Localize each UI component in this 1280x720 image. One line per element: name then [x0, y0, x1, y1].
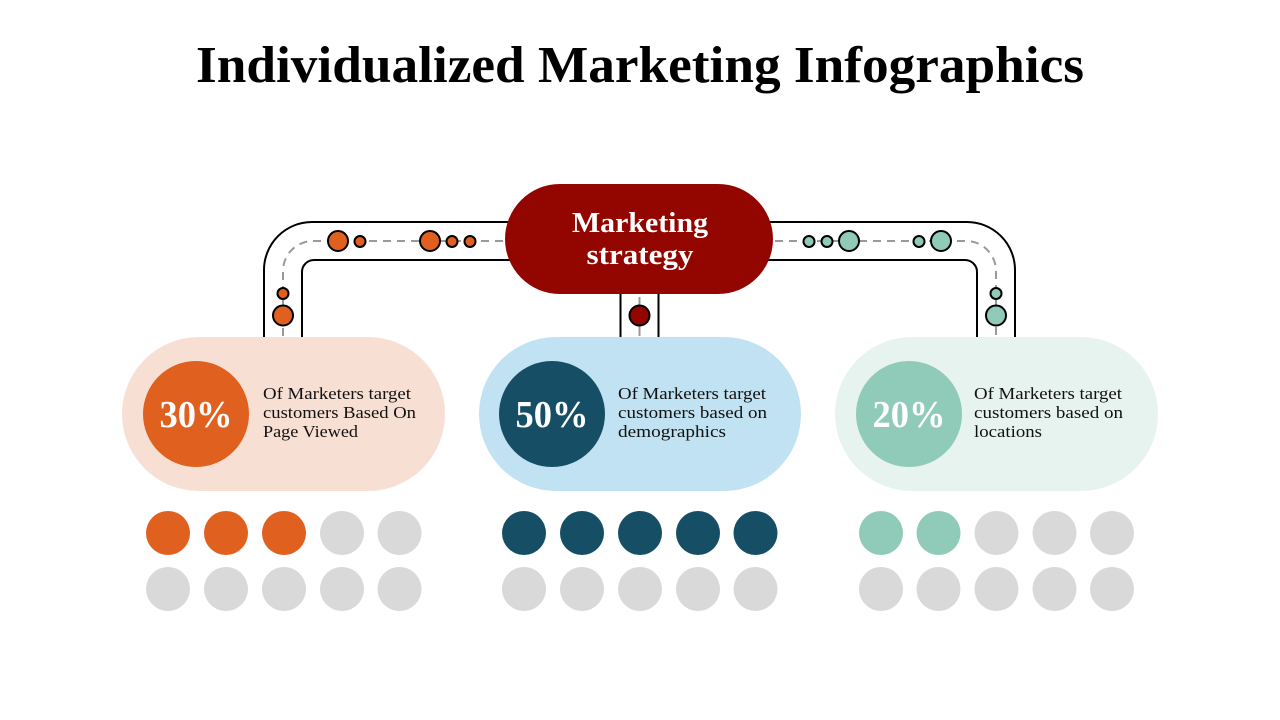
- panel: 30% page viewed: [122, 337, 445, 491]
- connector road: left and right arms: [264, 222, 1015, 340]
- panel: 50% demographics: 50%: [516, 394, 588, 436]
- connector road: centre stem: [620, 290, 658, 340]
- panel: 20% locations: Of Marketers target: [974, 384, 1122, 403]
- central node: marketing strategy: strategy: [586, 240, 694, 271]
- title: Individualized Marketing Infographics: [196, 37, 1084, 94]
- panel: 20% locations: locations: [974, 422, 1042, 441]
- orange route dots: [273, 231, 476, 326]
- green route dots: [804, 231, 1006, 326]
- panel: 20% locations: 20%: [872, 394, 946, 436]
- red route dot: [630, 306, 650, 326]
- dot gauge: 5 of 10: [502, 511, 778, 611]
- panel: 20% locations: [835, 337, 1158, 491]
- panel: 30% page viewed: Page Viewed: [263, 422, 359, 441]
- panel: 50% demographics: Of Marketers target: [618, 384, 766, 403]
- panel: 50% demographics: [479, 337, 801, 491]
- central node: marketing strategy: [505, 184, 773, 294]
- dot gauge: 2 of 10: [859, 511, 1134, 611]
- panel: 50% demographics: demographics: [618, 422, 726, 441]
- panel: 30% page viewed: customers Based On: [263, 403, 417, 422]
- central node: marketing strategy: Marketing: [572, 208, 708, 239]
- panel: 30% page viewed: Of Marketers target: [263, 384, 411, 403]
- panel: 20% locations: customers based on: [974, 403, 1124, 422]
- panel: 50% demographics: customers based on: [618, 403, 768, 422]
- panel: 30% page viewed: 30%: [160, 394, 232, 436]
- dot gauge: 3 of 10: [146, 511, 422, 611]
